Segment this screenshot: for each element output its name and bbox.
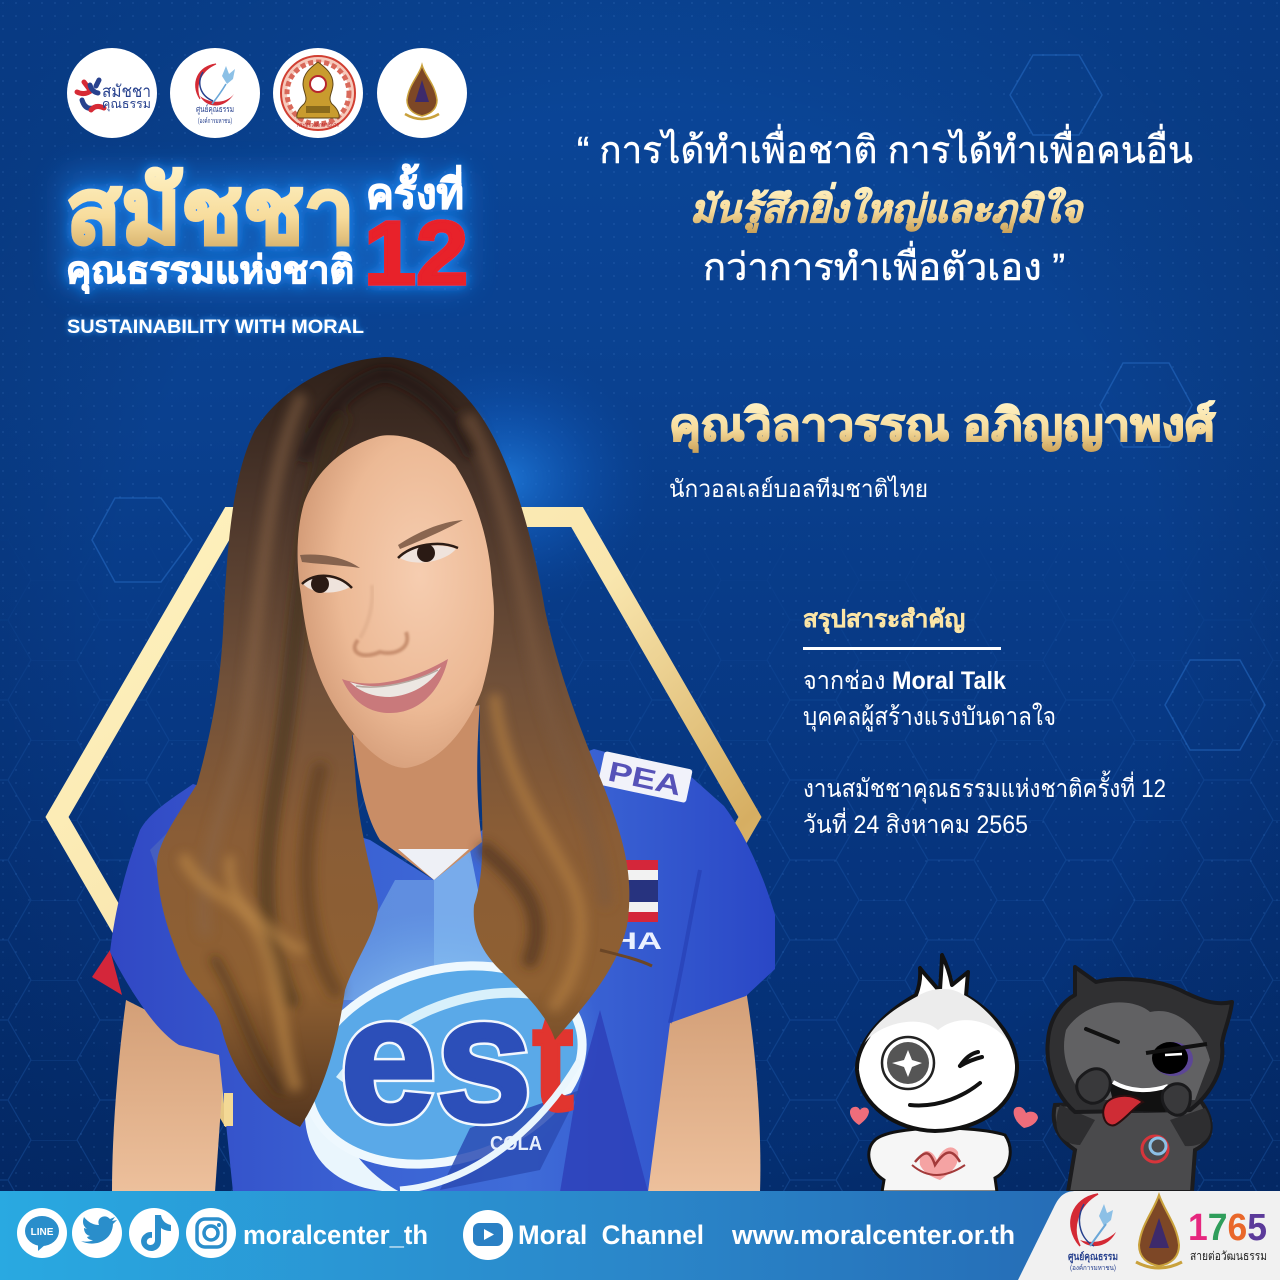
sponsor logo: COLA — [490, 1133, 542, 1155]
quote — [577, 124, 1193, 289]
country code: HA — [612, 928, 662, 955]
logo: moral center: (องค์การมหาชน) — [198, 117, 232, 125]
icon: twitter — [72, 1208, 122, 1258]
wink and smile — [910, 1052, 982, 1105]
sponsor logo — [284, 935, 606, 1195]
PEA patch: PEA — [605, 756, 684, 801]
quote: “ การได้ทำเพื่อชาติ การได้ทำเพื่อคนอื่น — [577, 124, 1193, 172]
icon: youtube — [463, 1210, 513, 1260]
summary text: บุคคลผู้สร้างแรงบันดาลใจ — [803, 702, 1056, 732]
logo: moral center: ศูนย์คุณธรรม — [196, 103, 234, 115]
title: samatcha: สมัชชา — [66, 161, 355, 263]
speaker role: นักวอลเลย์บอลทีมชาติไทย — [669, 475, 928, 503]
summary text: วันที่ 24 สิงหาคม 2565 — [803, 807, 1028, 839]
logo: moral center — [170, 48, 260, 138]
icon: tiktok — [129, 1208, 179, 1258]
logo: assembly star — [67, 48, 157, 138]
summary text — [803, 667, 1166, 839]
logo: moral center small: (องค์การมหาชน) — [1070, 1264, 1116, 1272]
body — [1054, 1100, 1211, 1192]
open eye — [1146, 1042, 1207, 1076]
head — [857, 955, 1017, 1131]
ears and head — [1047, 967, 1232, 1112]
eye — [882, 1037, 934, 1089]
website: www.moralcenter.or.th — [731, 1220, 1015, 1250]
logo: ministry seal — [273, 48, 363, 138]
mascot: white character — [850, 955, 1038, 1192]
tagline: SUSTAINABILITY WITH MORAL — [67, 317, 364, 338]
icon: instagram — [186, 1208, 236, 1258]
logo: moral center small: ศูนย์คุณธรรม — [1068, 1251, 1118, 1264]
logo row — [67, 48, 467, 138]
gold hexagon frame — [57, 517, 750, 1117]
sponsor logo: t — [532, 974, 574, 1142]
neck — [352, 700, 482, 880]
event title — [60, 161, 470, 338]
Thailand flag — [612, 860, 658, 922]
summary heading: สรุปสาระสำคัญ — [803, 606, 965, 635]
heart left — [850, 1107, 869, 1125]
eyes — [302, 544, 458, 593]
summary block — [803, 606, 1166, 839]
jersey — [110, 749, 775, 1195]
title: edition label: ครั้งที่ — [366, 164, 464, 217]
title: edition number: 12 — [364, 204, 468, 304]
logo: culture emblem — [377, 48, 467, 138]
icon: line — [17, 1208, 67, 1258]
hair — [157, 357, 652, 1127]
undershirt — [398, 849, 469, 880]
mouth and tongue — [1103, 1080, 1170, 1125]
logo: assembly star: คุณธรรม — [102, 97, 151, 112]
footer logo panel — [1018, 1191, 1280, 1280]
icon: line: LINE — [31, 1227, 54, 1238]
mascot: black character — [1047, 967, 1232, 1192]
chest emblem — [1142, 1136, 1168, 1162]
quote: กว่าการทำเพื่อตัวเอง ” — [703, 241, 1065, 289]
title: national morality: คุณธรรมแห่งชาติ — [66, 250, 354, 294]
arms — [112, 990, 760, 1192]
hands — [1077, 1069, 1190, 1115]
quote: มันรู้สึกยิ่งใหญ่และภูมิใจ — [690, 182, 1085, 233]
logo: culture emblem small — [1136, 1195, 1182, 1268]
logo: assembly star: สมัชชา — [102, 82, 151, 101]
portrait glow — [355, 350, 655, 610]
sponsor logo: es — [340, 959, 532, 1158]
mouth — [342, 659, 448, 713]
sponsor logo: es — [340, 959, 532, 1158]
social handle: moralcenter_th — [243, 1220, 428, 1250]
logo: ministry seal: กระทรวงศึกษาธิการ — [297, 120, 339, 129]
1765 mark: สายต่อวัฒนธรรม — [1190, 1249, 1267, 1263]
nose — [355, 632, 407, 655]
title glow backdrop — [60, 170, 470, 290]
logo: moral center small — [1068, 1194, 1118, 1272]
body — [869, 1128, 1010, 1192]
heart right — [1014, 1107, 1038, 1128]
summary text: จากช่อง Moral Talk — [803, 667, 1006, 695]
1765 mark: 1765 — [1188, 1207, 1267, 1249]
PEA patch — [598, 751, 693, 803]
hexagon stub beside arm — [224, 1093, 233, 1126]
footer bar — [0, 1191, 1280, 1280]
channel name: Moral Channel — [518, 1220, 704, 1250]
face — [298, 435, 494, 768]
closed eye — [1086, 1029, 1118, 1042]
hands heart — [912, 1147, 965, 1180]
speaker name: คุณวิลาวรรณ อภิญญาพงศ์ — [669, 400, 1216, 453]
red sleeve accent — [92, 950, 122, 995]
summary text: งานสมัชชาคุณธรรมแห่งชาติครั้งที่ 12 — [803, 770, 1166, 804]
brows — [300, 555, 360, 568]
portrait: volleyball player — [92, 357, 775, 1195]
